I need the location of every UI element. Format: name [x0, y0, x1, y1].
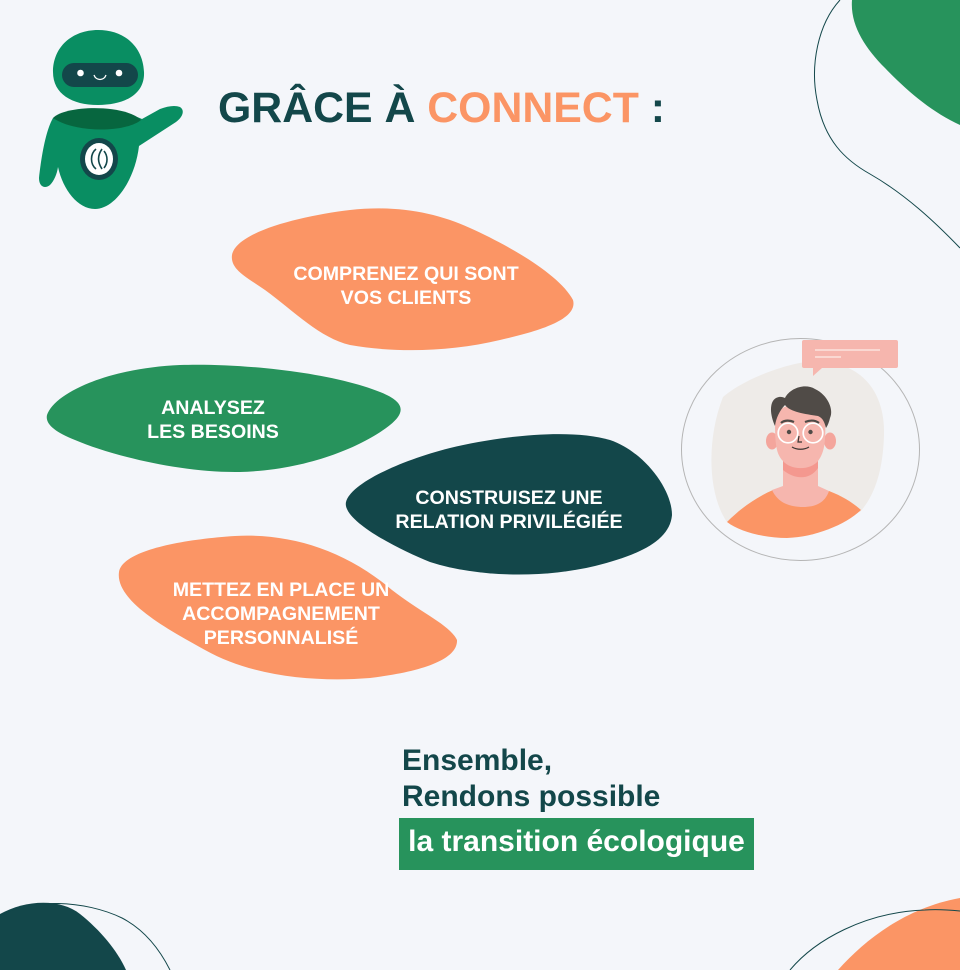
label: mettez: METTEZ EN PLACE UN [173, 579, 389, 601]
face [775, 404, 825, 468]
label: mettez: PERSONNALISÉ [204, 627, 358, 649]
label: comprenez [293, 263, 519, 309]
label: construisez: RELATION PRIVILÉGIÉE [395, 511, 623, 533]
robot head [53, 30, 144, 105]
label: mettez [173, 579, 389, 649]
icon: robot mascot [39, 30, 183, 209]
blob: construisez [346, 434, 672, 575]
top right decoration [815, 0, 960, 248]
robot badge [80, 138, 118, 180]
closing text: Rendons possible [402, 780, 660, 813]
robot visor [62, 63, 138, 87]
hair [771, 386, 831, 428]
closing text [402, 744, 660, 813]
glasses [778, 423, 798, 443]
speech bubble [802, 340, 898, 376]
label: comprenez: VOS CLIENTS [341, 287, 471, 309]
label: analysez: ANALYSEZ [161, 397, 265, 419]
closing text: Ensemble, [402, 744, 552, 777]
label: construisez: CONSTRUISEZ UNE [415, 487, 603, 509]
blob: mettez [119, 536, 457, 679]
neck [772, 460, 829, 507]
label: comprenez: COMPRENEZ QUI SONT [293, 263, 519, 285]
portrait circle [682, 338, 920, 560]
robot body and arm [39, 106, 183, 209]
ears [766, 432, 778, 450]
bottom left decoration [0, 903, 170, 970]
robot collar [53, 108, 141, 130]
highlighted closing text: la transition écologique [408, 825, 745, 858]
portrait backdrop [711, 361, 884, 522]
bottom right decoration [790, 898, 960, 970]
nose and mouth [792, 436, 809, 449]
eyebrows [781, 421, 819, 423]
blob: comprenez [232, 208, 574, 350]
title: GRÂCE À CONNECT : [218, 84, 665, 132]
label: mettez: ACCOMPAGNEMENT [182, 603, 380, 625]
shirt [727, 490, 861, 538]
icon: person portrait [682, 338, 920, 560]
highlighted closing text [399, 818, 754, 870]
blob: analysez [47, 365, 401, 472]
label: analysez [147, 397, 279, 443]
label: construisez [395, 487, 623, 533]
label: analysez: LES BESOINS [147, 421, 279, 443]
